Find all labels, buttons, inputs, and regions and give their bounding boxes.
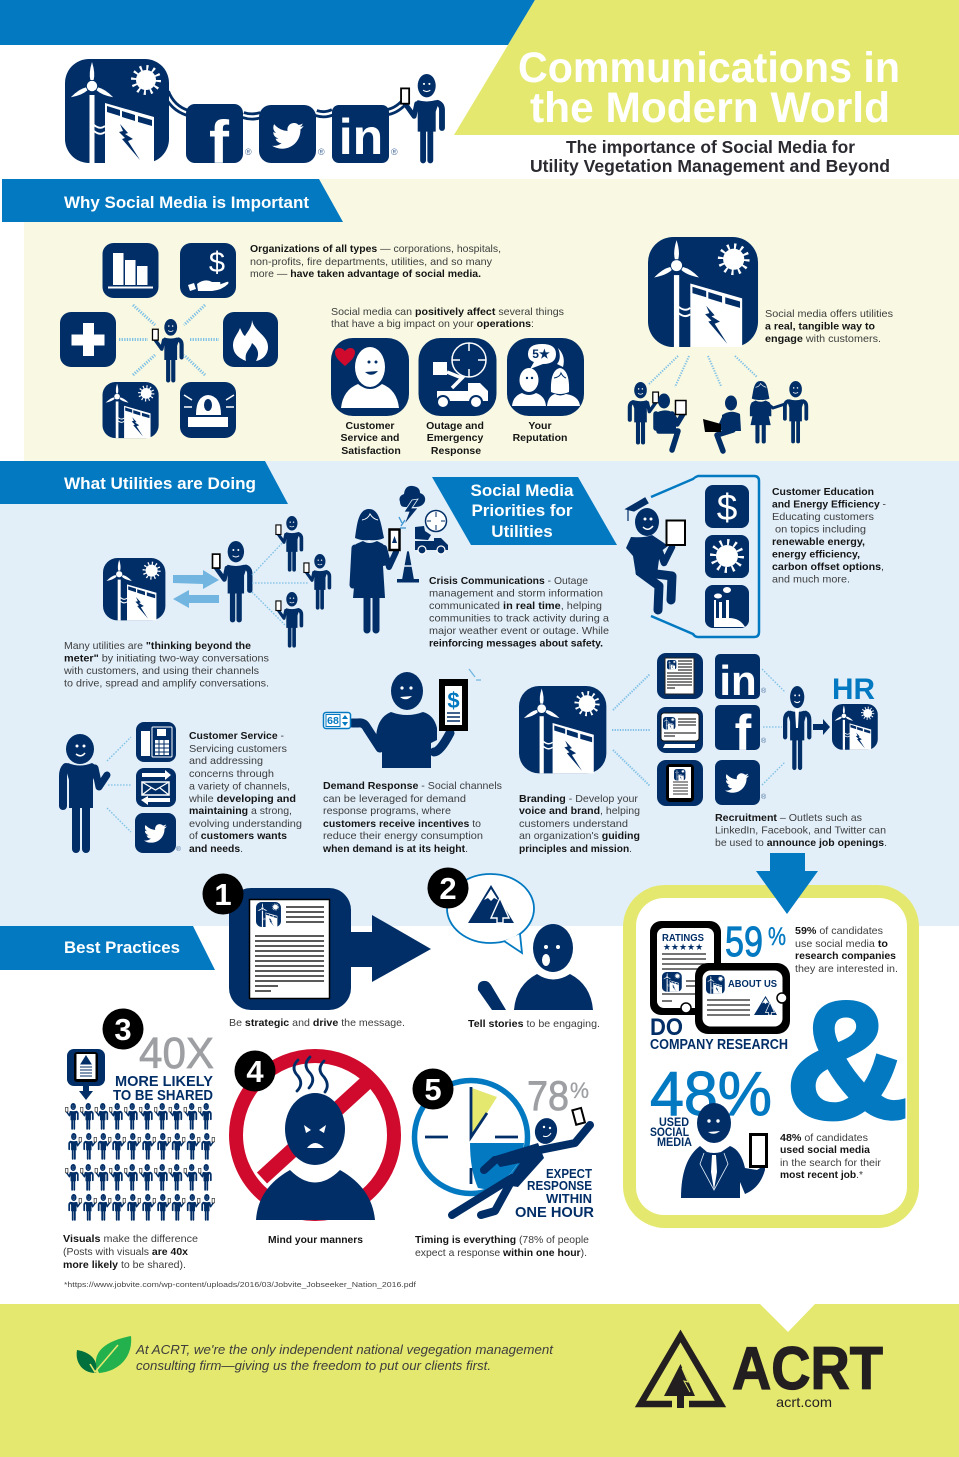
people grid: 40 people bbox=[66, 1103, 214, 1220]
text: 48 percent of candidates: used social media bbox=[780, 1144, 870, 1156]
text: customer service: maintaining a strong, bbox=[189, 805, 292, 817]
person in suit with phone bbox=[681, 1103, 766, 1198]
stat: 59%: % bbox=[768, 923, 786, 951]
labels for the three icons: Service and bbox=[341, 432, 399, 444]
practice 4: mind your manners, angry face in prohibition sign bbox=[234, 1050, 394, 1220]
logo: ACRT: ACRT bbox=[732, 1335, 883, 1402]
text: branding: principles and mission. bbox=[519, 843, 632, 855]
section heading: What Utilities are Doing bbox=[0, 461, 288, 504]
practice 5: clock and person expecting response: 78 bbox=[527, 1072, 569, 1119]
stat: 48%: 48% bbox=[650, 1060, 772, 1129]
practice 3: 40x more likely to be shared: MORE LIKELY bbox=[115, 1073, 213, 1090]
text: customer service: while developing and bbox=[188, 793, 296, 805]
practice 3: 40x more likely to be shared: TO BE SHARED bbox=[113, 1087, 213, 1104]
arrow: from recruitment to statistics bbox=[756, 853, 818, 914]
text: recruitment: Recruitment – Outlets such as bbox=[715, 812, 862, 824]
text: organizations of all types: more — have taken advantage of social media. bbox=[250, 268, 481, 280]
text: 48 percent of candidates: 48% of candidates bbox=[780, 1132, 868, 1144]
practice 5: clock and person expecting response: 5 bbox=[424, 1072, 442, 1107]
practice 2: storytelling speech bubble and listener bbox=[428, 868, 593, 1010]
recruitment illustration: HR bbox=[832, 673, 875, 706]
text: 48 percent of candidates bbox=[780, 1132, 882, 1181]
customer education illustration bbox=[626, 476, 759, 637]
text: demand response: response programs, where bbox=[323, 805, 451, 817]
text: thinking beyond the meter bbox=[63, 640, 269, 690]
text: tangible way to engage: Social media offers utilities bbox=[765, 308, 893, 320]
tablet: ratings bbox=[650, 921, 721, 1015]
caption 3: (Posts with visuals are 40x bbox=[63, 1246, 188, 1258]
demand response illustration bbox=[324, 669, 481, 768]
labels for the three icons: Outage and bbox=[426, 420, 484, 432]
text: organizations of all types: non-profits, fire departments, utilities, and so many bbox=[250, 256, 493, 268]
text: crisis communications: Crisis Communications - Outage bbox=[429, 575, 588, 587]
icon: customer service bbox=[331, 338, 409, 416]
icon: your reputation bbox=[507, 338, 584, 416]
labels for the three icons: Satisfaction bbox=[341, 445, 401, 457]
practice 5: clock and person expecting response: ONE HOUR bbox=[515, 1204, 594, 1221]
subtitle: The importance of Social Media for bbox=[566, 137, 855, 157]
customer education illustration: $ bbox=[717, 487, 737, 528]
practice 3: 40x more likely to be shared bbox=[66, 1008, 214, 1220]
text: organizations of all types bbox=[250, 243, 501, 280]
caption 3: more likely to be shared). bbox=[63, 1259, 186, 1271]
header illustration: utility connected to social networks: ® bbox=[318, 147, 325, 157]
caption 5: expect a response within one hour). bbox=[415, 1247, 587, 1259]
section heading: Best Practices bbox=[0, 926, 215, 970]
text: branding: customers understand bbox=[519, 818, 628, 830]
tablet: ratings: RATINGS bbox=[662, 933, 704, 944]
text: demand response: can be leveraged for demand bbox=[323, 793, 466, 805]
tablet: ratings: ★★★★★ bbox=[663, 942, 703, 952]
title: the Modern World bbox=[530, 84, 890, 132]
text: customer service: concerns through bbox=[189, 768, 274, 780]
text: customer education and energy efficiency: and much more. bbox=[772, 574, 850, 586]
text: customer education and energy efficiency: and Energy Efficiency - bbox=[772, 498, 886, 510]
logo: ACRT: acrt.com bbox=[776, 1394, 832, 1410]
text: 59 percent of candidates: use social media to bbox=[795, 938, 888, 950]
label: used social media: SOCIAL bbox=[650, 1127, 689, 1139]
text: customer education and energy efficiency: energy efficiency, bbox=[772, 548, 860, 560]
crisis illustration: woman, storm, truck, cone bbox=[352, 486, 448, 630]
header illustration: utility connected to social networks: ® bbox=[245, 147, 252, 157]
text: customer service: Customer Service - bbox=[189, 730, 284, 742]
text: recruitment bbox=[715, 812, 887, 849]
text: 48 percent of candidates: in the search for their bbox=[780, 1157, 882, 1169]
text: customer education and energy efficiency bbox=[772, 486, 886, 586]
text: customer service: Servicing customers bbox=[189, 743, 287, 755]
branding illustration bbox=[519, 653, 703, 806]
recruitment illustration bbox=[715, 654, 878, 805]
section heading: Why Social Media is Important bbox=[2, 179, 343, 222]
icon: large utility brand bbox=[648, 237, 758, 347]
footer text: consulting firm—giving us the freedom to put our clients first. bbox=[136, 1358, 491, 1373]
text: crisis communications: management and storm information bbox=[429, 588, 603, 600]
label: do company research: DO bbox=[650, 1014, 683, 1041]
text: branding: an organization's guiding bbox=[519, 830, 640, 842]
stat: 59%: 59 bbox=[725, 918, 763, 966]
label: do company research bbox=[650, 1014, 788, 1053]
caption 1: Be strategic and drive the message. bbox=[229, 1017, 405, 1029]
text: crisis communications bbox=[429, 575, 609, 650]
heading ribbon: Social Media Priorities for Utilities: Social Media bbox=[471, 481, 574, 500]
labels for the three icons: Customer bbox=[345, 420, 395, 432]
text: thinking beyond the meter: to drive, spread and amplify conversations. bbox=[64, 678, 269, 690]
demand response illustration: 68 bbox=[327, 715, 339, 727]
practice 5: clock and person expecting response: RESPONSE bbox=[527, 1179, 592, 1193]
text: recruitment: LinkedIn, Facebook, and Twitter can bbox=[715, 824, 886, 836]
practice 5: clock and person expecting response bbox=[412, 1068, 594, 1221]
caption 2: Tell stories to be engaging. bbox=[468, 1018, 600, 1030]
text: customer education and energy efficiency: renewable energy, bbox=[772, 536, 865, 548]
text: customer service: and addressing bbox=[189, 755, 263, 767]
label: do company research: COMPANY RESEARCH bbox=[650, 1037, 788, 1053]
title bbox=[518, 44, 900, 132]
subtitle bbox=[530, 137, 890, 176]
icon cluster: sectors around a person bbox=[60, 243, 278, 438]
text: 59 percent of candidates bbox=[795, 925, 898, 975]
labels for the three icons bbox=[341, 420, 567, 457]
icon: leaf checkmark bbox=[77, 1336, 131, 1373]
header illustration: utility connected to social networks: f bbox=[209, 109, 230, 176]
demand response illustration: $ bbox=[447, 688, 460, 713]
text: demand response: Demand Response - Social channels bbox=[323, 780, 502, 792]
header illustration: utility connected to social networks: ® bbox=[391, 147, 398, 157]
text: customer education and energy efficiency: on topics including bbox=[775, 524, 866, 536]
labels for the three icons: Reputation bbox=[513, 432, 567, 444]
text: customer education and energy efficiency: Educating customers bbox=[772, 511, 874, 523]
panel: company research and social media statistics bbox=[623, 853, 919, 1228]
practice 5: clock and person expecting response: EXPECT bbox=[546, 1167, 592, 1181]
text: demand response: reduce their energy consumption bbox=[323, 830, 483, 842]
panel: light blue section background bbox=[0, 461, 959, 926]
heading ribbon: Social Media Priorities for Utilities: Priorities for bbox=[471, 501, 573, 520]
labels for the three icons: Your bbox=[528, 420, 552, 432]
practice 3: 40x more likely to be shared: 40X bbox=[139, 1029, 214, 1078]
text: customer service: of customers wants bbox=[189, 830, 287, 842]
text: customer education and energy efficiency: Customer Education bbox=[772, 486, 874, 498]
text: 59 percent of candidates: 59% of candidates bbox=[795, 925, 883, 937]
text: branding bbox=[519, 793, 640, 855]
practice 1: strategic document with arrow bbox=[202, 874, 431, 1010]
heading ribbon: Social Media Priorities for Utilities: Utilities bbox=[491, 522, 553, 541]
text: tangible way to engage bbox=[765, 308, 893, 345]
caption 5: Timing is everything (78% of people bbox=[415, 1234, 589, 1246]
text: demand response: when demand is at its height. bbox=[322, 843, 468, 855]
header: blue top band bbox=[0, 0, 535, 45]
text: positively affect: Social media can positively affect several things bbox=[331, 306, 564, 318]
footer band bbox=[0, 1304, 959, 1457]
caption 4: Mind your manners bbox=[268, 1234, 363, 1246]
labels for the three icons: Emergency bbox=[427, 432, 483, 444]
practice 2: storytelling speech bubble and listener: 2 bbox=[439, 871, 457, 906]
section heading: Best Practices: Best Practices bbox=[64, 938, 180, 957]
text: 59 percent of candidates: they are interested in. bbox=[795, 963, 898, 975]
text: positively affect bbox=[331, 306, 564, 330]
text: customer education and energy efficiency: carbon offset options, bbox=[772, 561, 884, 573]
text: 48 percent of candidates: most recent job.* bbox=[780, 1169, 863, 1181]
text: customer service: and needs. bbox=[189, 843, 243, 855]
header illustration: utility connected to social networks: in bbox=[339, 109, 383, 165]
footer text: At ACRT, we're the only independent national vegegation management bbox=[135, 1342, 554, 1357]
text: branding: voice and brand, helping bbox=[519, 805, 640, 817]
two-way conversation diagram bbox=[103, 516, 329, 646]
recruitment illustration: ® bbox=[761, 737, 767, 745]
text: recruitment: be used to announce job openings. bbox=[715, 837, 887, 849]
recruitment illustration: ® bbox=[761, 687, 767, 695]
text: crisis communications: major weather event or outage. While bbox=[429, 625, 609, 637]
footer text bbox=[135, 1342, 554, 1373]
section heading: What Utilities are Doing: What Utilities are Doing bbox=[64, 474, 256, 493]
label: used social media bbox=[650, 1117, 692, 1149]
text: thinking beyond the meter: with customers, and using their channels bbox=[63, 665, 259, 677]
section heading: Why Social Media is Important: Why Social Media is Important bbox=[64, 193, 309, 212]
practice 5: clock and person expecting response: WITHIN bbox=[546, 1192, 592, 1206]
text: demand response: customers receive incentives to bbox=[323, 818, 481, 830]
header: yellow title panel bbox=[454, 0, 959, 135]
panel: cream section background bbox=[24, 179, 959, 461]
caption 3: Visuals make the difference bbox=[63, 1233, 198, 1245]
practice 1: strategic document with arrow: 1 bbox=[214, 877, 232, 912]
recruitment illustration: f bbox=[735, 705, 752, 761]
caption 5 bbox=[415, 1234, 589, 1259]
text: customer service bbox=[188, 730, 302, 855]
tablet: about us bbox=[695, 963, 790, 1034]
header illustration: utility connected to social networks bbox=[65, 59, 442, 176]
subtitle: Utility Vegetation Management and Beyond bbox=[530, 156, 890, 176]
text: organizations of all types: Organizations of all types — corporations, hospitals, bbox=[250, 243, 501, 255]
text: crisis communications: communities to track activity during a bbox=[429, 612, 609, 624]
heading ribbon: Social Media Priorities for Utilities bbox=[432, 477, 617, 545]
logo: ACRT bbox=[640, 1335, 883, 1410]
title: Communications in bbox=[518, 44, 900, 92]
tablet: about us: ABOUT US bbox=[728, 979, 777, 990]
text: tangible way to engage: a real, tangible way to bbox=[765, 320, 875, 332]
ampersand: & bbox=[785, 966, 909, 1154]
text: tangible way to engage: engage with customers. bbox=[765, 333, 881, 345]
recruitment illustration: ® bbox=[761, 793, 767, 801]
footnote: *https://www.jobvite.com/wp-content/uploads/2016/03/Jobvite_Jobseeker_Nation_2016.pdf bbox=[64, 1280, 417, 1289]
text: branding: Branding - Develop your bbox=[519, 793, 639, 805]
text: demand response bbox=[322, 780, 502, 855]
text: crisis communications: reinforcing messages about safety. bbox=[429, 638, 603, 650]
practice 3: 40x more likely to be shared: 3 bbox=[114, 1012, 132, 1047]
practice 5: clock and person expecting response: % bbox=[570, 1078, 589, 1103]
icon: outage and emergency bbox=[418, 338, 496, 416]
icon: your reputation: 5★ bbox=[532, 347, 550, 361]
text: customer service: evolving understanding bbox=[189, 818, 302, 830]
icon cluster: sectors around a person: $ bbox=[209, 247, 225, 279]
text: customer service: a variety of channels, bbox=[189, 780, 290, 792]
text: thinking beyond the meter: meter" by initiating two-way conversations bbox=[64, 652, 269, 664]
text: 59 percent of candidates: research companies bbox=[795, 950, 896, 962]
label: used social media: MEDIA bbox=[657, 1137, 692, 1149]
caption 3 bbox=[63, 1233, 198, 1271]
label: used social media: USED bbox=[659, 1117, 689, 1129]
customers group with connection lines bbox=[630, 356, 806, 451]
text: thinking beyond the meter: Many utilities are "thinking beyond the bbox=[64, 640, 251, 652]
text: positively affect: that have a big impact on your operations: bbox=[331, 318, 534, 330]
recruitment illustration: in bbox=[719, 657, 757, 704]
text: crisis communications: communicated in real time, helping bbox=[429, 600, 602, 612]
labels for the three icons: Response bbox=[431, 445, 481, 457]
practice 4: mind your manners, angry face in prohibition sign: 4 bbox=[246, 1054, 264, 1089]
customer service illustration: person with phone, mail, twitter: ® bbox=[176, 845, 181, 853]
customer service illustration: person with phone, mail, twitter bbox=[63, 722, 181, 853]
